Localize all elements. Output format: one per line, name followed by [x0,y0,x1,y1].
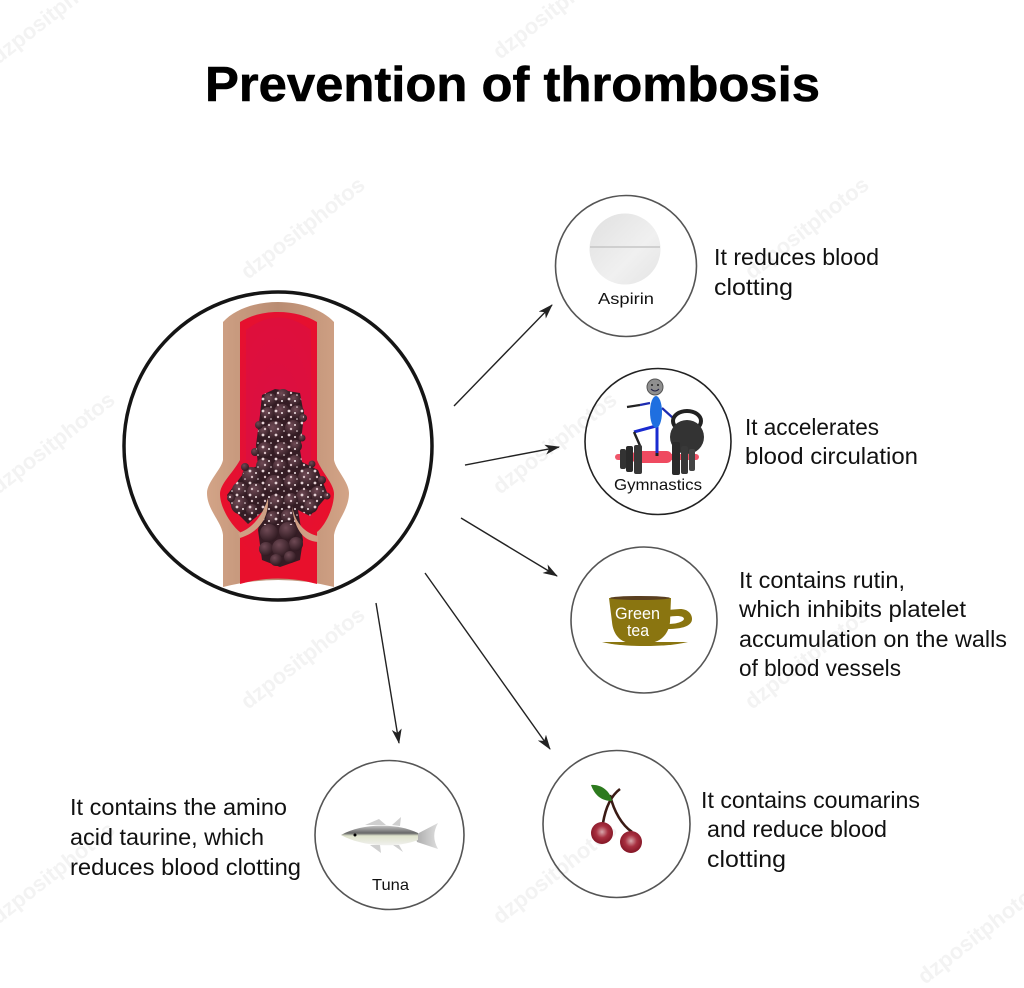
text: cherry effect: clotting [707,846,786,872]
text: aspirin effect: It reduces blood [714,244,879,270]
text: cherry effect: It contains coumarins [701,787,920,813]
watermark: dzpositphotos [488,817,622,929]
label: gymnastics: Gymnastics [614,477,702,494]
icon: cherries [591,785,642,853]
panel: aspirin [556,196,696,336]
vessel wall [207,302,349,587]
text: tuna effect: It contains the amino [70,794,287,820]
text: green tea effect: of blood vessels [739,655,901,681]
text: tuna effect [70,794,301,880]
text: cherry effect [701,787,920,872]
thrombus [227,389,330,567]
watermark: dzpositphotos [236,602,370,714]
arrow: to cherry [425,573,550,749]
text: green tea effect [738,567,1007,681]
watermark: dzpositphotos [236,172,370,284]
text: gymnastics effect: It accelerates [745,414,879,440]
panel: cherry [543,750,690,898]
label: aspirin: Aspirin [598,291,654,308]
arrow: to gymnastics [465,447,559,465]
label: tuna: Tuna [372,877,409,894]
icon: aspirin pill [590,214,660,284]
text: cherry effect: and reduce blood [707,816,887,842]
watermark: dzpositphotos [488,387,622,499]
text: gymnastics effect: blood circulation [745,443,918,469]
panel: green tea [571,547,717,693]
text: aspirin effect [714,244,879,300]
valve flaps [238,498,268,538]
arrow: to green tea [461,518,557,576]
text: tuna effect: reduces blood clotting [70,854,301,880]
panel: gymnastics [585,368,731,514]
text: aspirin effect: clotting [714,274,793,300]
icon: tea cup: Green [615,604,660,623]
icon: tea cup: tea [627,621,649,640]
icon: figure with weights [615,379,704,475]
text: green tea effect: which inhibits platelet [738,596,967,622]
text: green tea effect: It contains rutin, [739,567,905,593]
text: green tea effect: accumulation on the walls [739,626,1007,652]
icon: tea cup [602,596,692,646]
title: Prevention of thrombosis [205,58,820,112]
icon: tuna fish [341,817,438,853]
arrow: to tuna [376,603,399,743]
panel: blood vessel with thrombus [124,292,432,600]
arrow: to aspirin [454,305,552,406]
text: tuna effect: acid taurine, which [70,824,264,850]
panel: tuna [315,760,464,910]
watermark: dzpositphotos [740,172,874,284]
text: gymnastics effect [745,414,918,469]
watermark: dzpositphotos [740,602,874,714]
vessel lumen [220,312,334,584]
